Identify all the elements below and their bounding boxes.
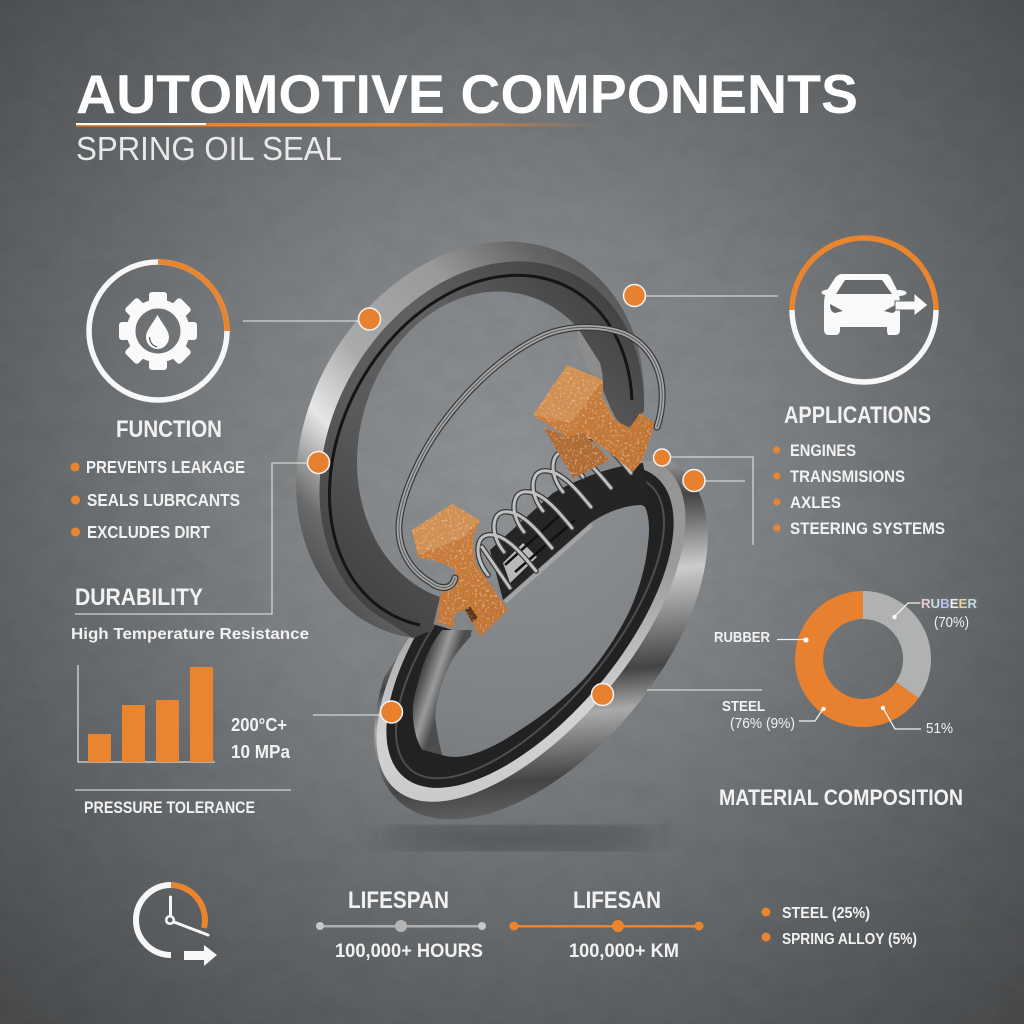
lifespan hours [316, 887, 486, 962]
donut chart: material composition [777, 591, 931, 729]
durability caption: High Temperature Resistance [71, 626, 309, 643]
donut label: rubber 70 percent: RUBEER [921, 596, 978, 611]
lifespan kilometres: 100,000+ KM [569, 941, 679, 962]
donut label: rubber 70 percent: (70%) [934, 614, 969, 631]
heading: durability: DURABILITY [75, 584, 203, 611]
icon: car with arrow [792, 238, 936, 382]
spring coil [478, 437, 631, 588]
material legend: SPRING ALLOY (5%) [782, 931, 917, 948]
wire retaining ring [399, 327, 662, 588]
applications list: AXLES [790, 494, 841, 512]
donut label: steel [722, 698, 795, 732]
donut label: 51 percent: 51% [926, 720, 953, 737]
durability values: 200°C+ [231, 715, 287, 735]
callout dots and leader lines [75, 284, 778, 790]
donut label: rubber 70 percent [920, 596, 978, 631]
lifespan kilometres [510, 887, 704, 962]
durability values [231, 715, 291, 762]
lifespan kilometres: LIFESAN [573, 887, 661, 914]
function list: EXCLUDES DIRT [87, 522, 210, 542]
donut label: steel: (76% (9%) [730, 715, 795, 732]
ring shadow [380, 827, 660, 849]
bar chart [78, 665, 215, 762]
material legend [762, 905, 917, 948]
lifespan hours: 100,000+ HOURS [335, 941, 483, 962]
applications list: STEERING SYSTEMS [790, 520, 945, 538]
heading: material composition: MATERIAL COMPOSITION [719, 785, 963, 810]
function list: SEALS LUBRCANTS [87, 490, 240, 510]
icon: clock with arrow [136, 885, 217, 966]
upper ring [296, 242, 644, 638]
spring oil seal illustration [296, 242, 708, 820]
copper block: lower [412, 504, 508, 637]
title: AUTOMOTIVE COMPONENTS [76, 63, 858, 125]
material legend: STEEL (25%) [782, 905, 870, 922]
function list [70, 457, 245, 542]
pressure tolerance caption: PRESSURE TOLERANCE [84, 798, 255, 817]
heading: function: FUNCTION [116, 416, 222, 443]
subtitle: SPRING OIL SEAL [76, 130, 342, 167]
function list: PREVENTS LEAKAGE [86, 457, 245, 477]
dark inner sleeve [490, 463, 650, 602]
heading: applications: APPLICATIONS [784, 402, 931, 429]
applications list [773, 442, 945, 538]
icon: gear and oil drop [89, 262, 227, 400]
copper block: upper [533, 365, 655, 478]
applications list: TRANSMISIONS [790, 468, 905, 486]
lifespan hours: LIFESPAN [348, 887, 449, 914]
donut label: steel: STEEL [722, 698, 765, 715]
durability values: 10 MPa [231, 742, 291, 762]
applications list: ENGINES [790, 442, 856, 460]
donut label: rubber: RUBBER [714, 629, 770, 646]
lower ring [374, 460, 708, 820]
